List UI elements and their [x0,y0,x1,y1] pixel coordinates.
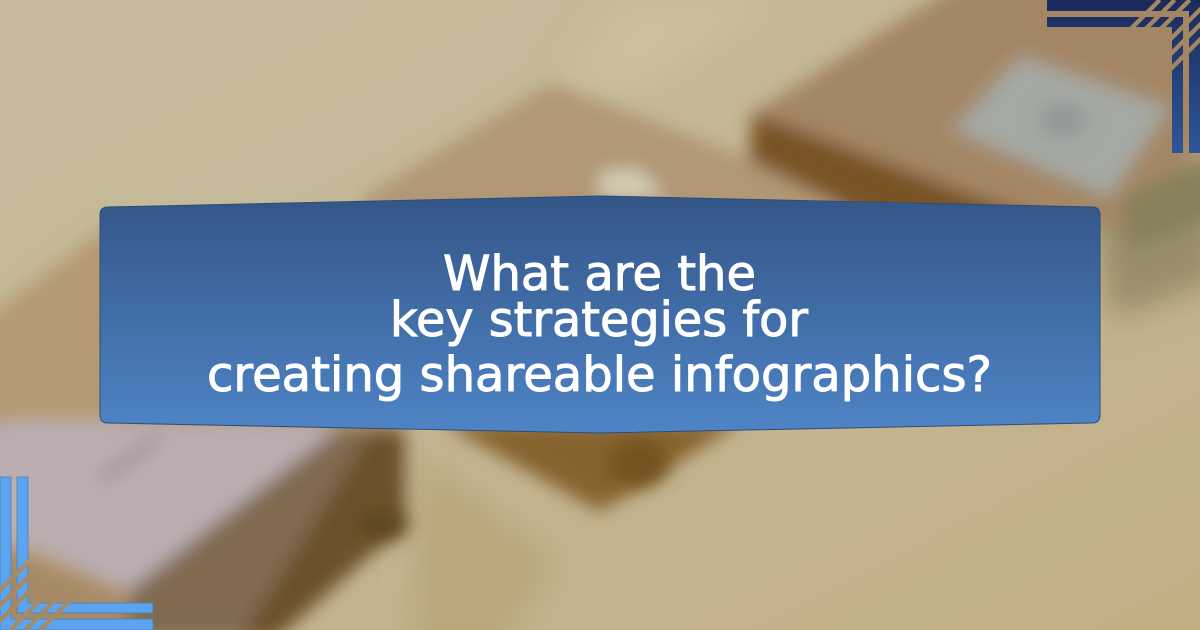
parcel: left box upper face [0,225,405,630]
parcel: lower-left box [0,420,405,630]
corner ornament: bottom left [0,477,153,630]
corner ornament: top right [1047,0,1200,153]
banner [100,196,1100,433]
title: What are the [443,246,756,302]
title: key strategies for [390,292,808,348]
title: creating shareable infographics? [207,347,992,403]
parcel: right box [749,0,1200,250]
parcel: centre box [330,83,835,512]
title [207,246,992,403]
